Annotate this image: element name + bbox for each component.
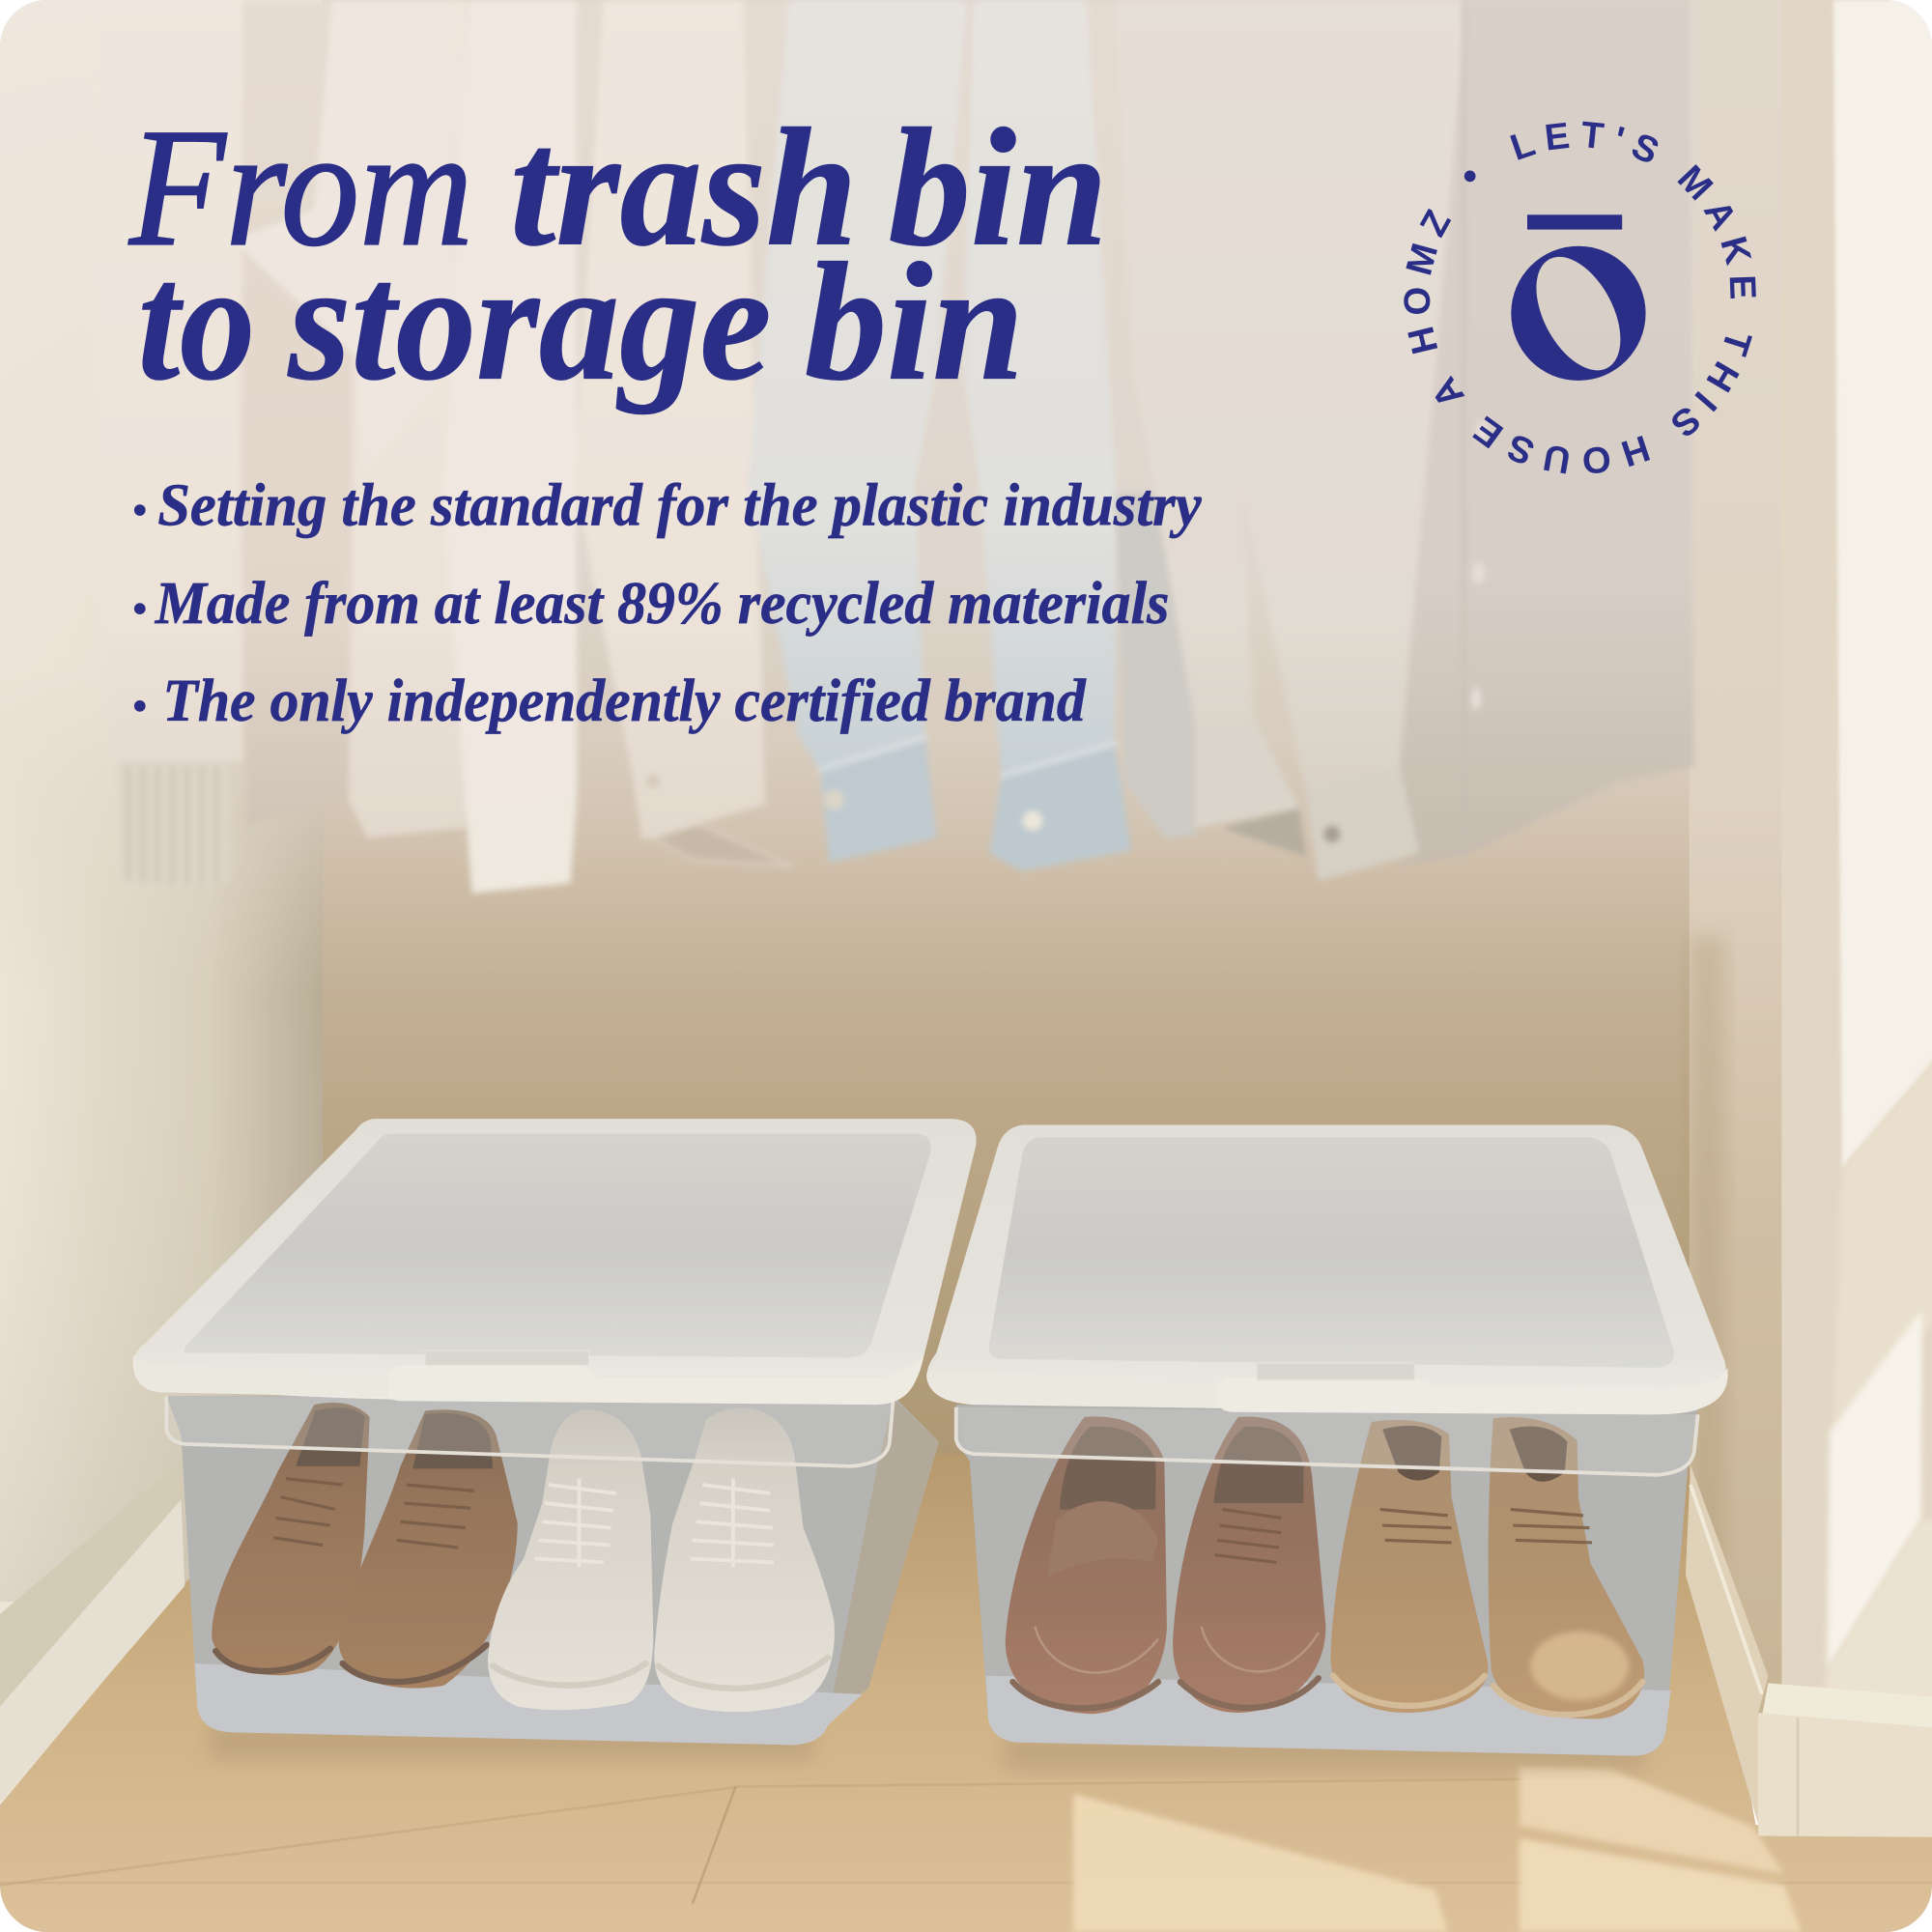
bullet two: Made from at least 89% recycled materials — [155, 569, 1169, 637]
translucent floor of right bin — [985, 1676, 1671, 1756]
lid right — [926, 1125, 1728, 1414]
floor — [0, 1454, 1932, 1932]
floor shadow below right bin — [1005, 1737, 1645, 1770]
logo o mark — [1511, 246, 1646, 381]
bin body right — [956, 1405, 1698, 1756]
cream shirts — [1155, 491, 1420, 881]
grey shirt — [1396, 0, 1694, 867]
bullet one: Setting the standard for the plastic industry — [157, 470, 1202, 538]
title: trash — [510, 94, 858, 281]
lid left — [133, 1119, 977, 1405]
title: bin — [805, 228, 1024, 415]
title — [128, 94, 1108, 415]
circular slogan: LET'S MAKE THIS HOUSE A HOMZ — [1404, 122, 1756, 473]
translucent front wall right — [956, 1407, 1698, 1756]
denim shirt with cuff — [748, 0, 967, 863]
grey blue shirt behind — [1115, 493, 1196, 838]
translucent front wall left — [166, 1396, 894, 1745]
right wall — [1690, 0, 1786, 1725]
brown shoe two — [339, 1409, 518, 1689]
bullet dot three — [134, 700, 146, 712]
right pillar with sunlight — [1781, 0, 1932, 1707]
tan chukka two with sunlight — [1489, 1417, 1644, 1719]
bin rim line right — [956, 1407, 1698, 1475]
left wall — [0, 0, 323, 1824]
knit sweater sleeve — [89, 0, 242, 886]
white sneaker one — [488, 1409, 653, 1710]
title: to — [138, 228, 255, 415]
shoes right bin — [1006, 1416, 1644, 1719]
pale shirt and cuff — [574, 0, 792, 867]
shoes left bin — [212, 1403, 835, 1712]
red brown loafer — [1006, 1416, 1167, 1714]
bullet three: The only independently certified brand — [162, 667, 1087, 734]
logo badge — [1404, 122, 1756, 473]
right baseboard — [1686, 1465, 1932, 1837]
shirt three with collar fold — [234, 0, 466, 838]
title: bin — [889, 94, 1108, 281]
bin rim line left — [166, 1396, 894, 1466]
storage bin left — [133, 1119, 977, 1745]
left baseboard — [0, 1499, 185, 1706]
brown shoe one — [212, 1403, 370, 1675]
title: storage — [288, 228, 771, 415]
tan chukka one — [1330, 1420, 1488, 1713]
ring dot — [1464, 171, 1476, 182]
bullet dot two — [134, 603, 146, 614]
hanging clothes — [89, 0, 1694, 894]
bullet dot one — [134, 504, 146, 516]
floor shadow below left bin — [209, 1729, 814, 1761]
right side panel of left bin — [828, 1399, 939, 1719]
white sneaker two — [654, 1407, 835, 1712]
red brown shoe two — [1173, 1416, 1325, 1713]
shirt two — [251, 811, 255, 817]
title: From — [128, 94, 473, 281]
bin body left — [166, 1396, 939, 1745]
white shirt cuff sleeve — [443, 0, 577, 894]
bullet list — [134, 470, 1202, 734]
logo macron bar — [1527, 214, 1622, 230]
translucent floor of left bin — [195, 1663, 863, 1745]
clothes backdrop shade — [578, 4, 1262, 612]
storage bin right — [926, 1125, 1728, 1756]
back wall — [314, 0, 1700, 1479]
second denim shirt with cuff — [963, 0, 1131, 871]
